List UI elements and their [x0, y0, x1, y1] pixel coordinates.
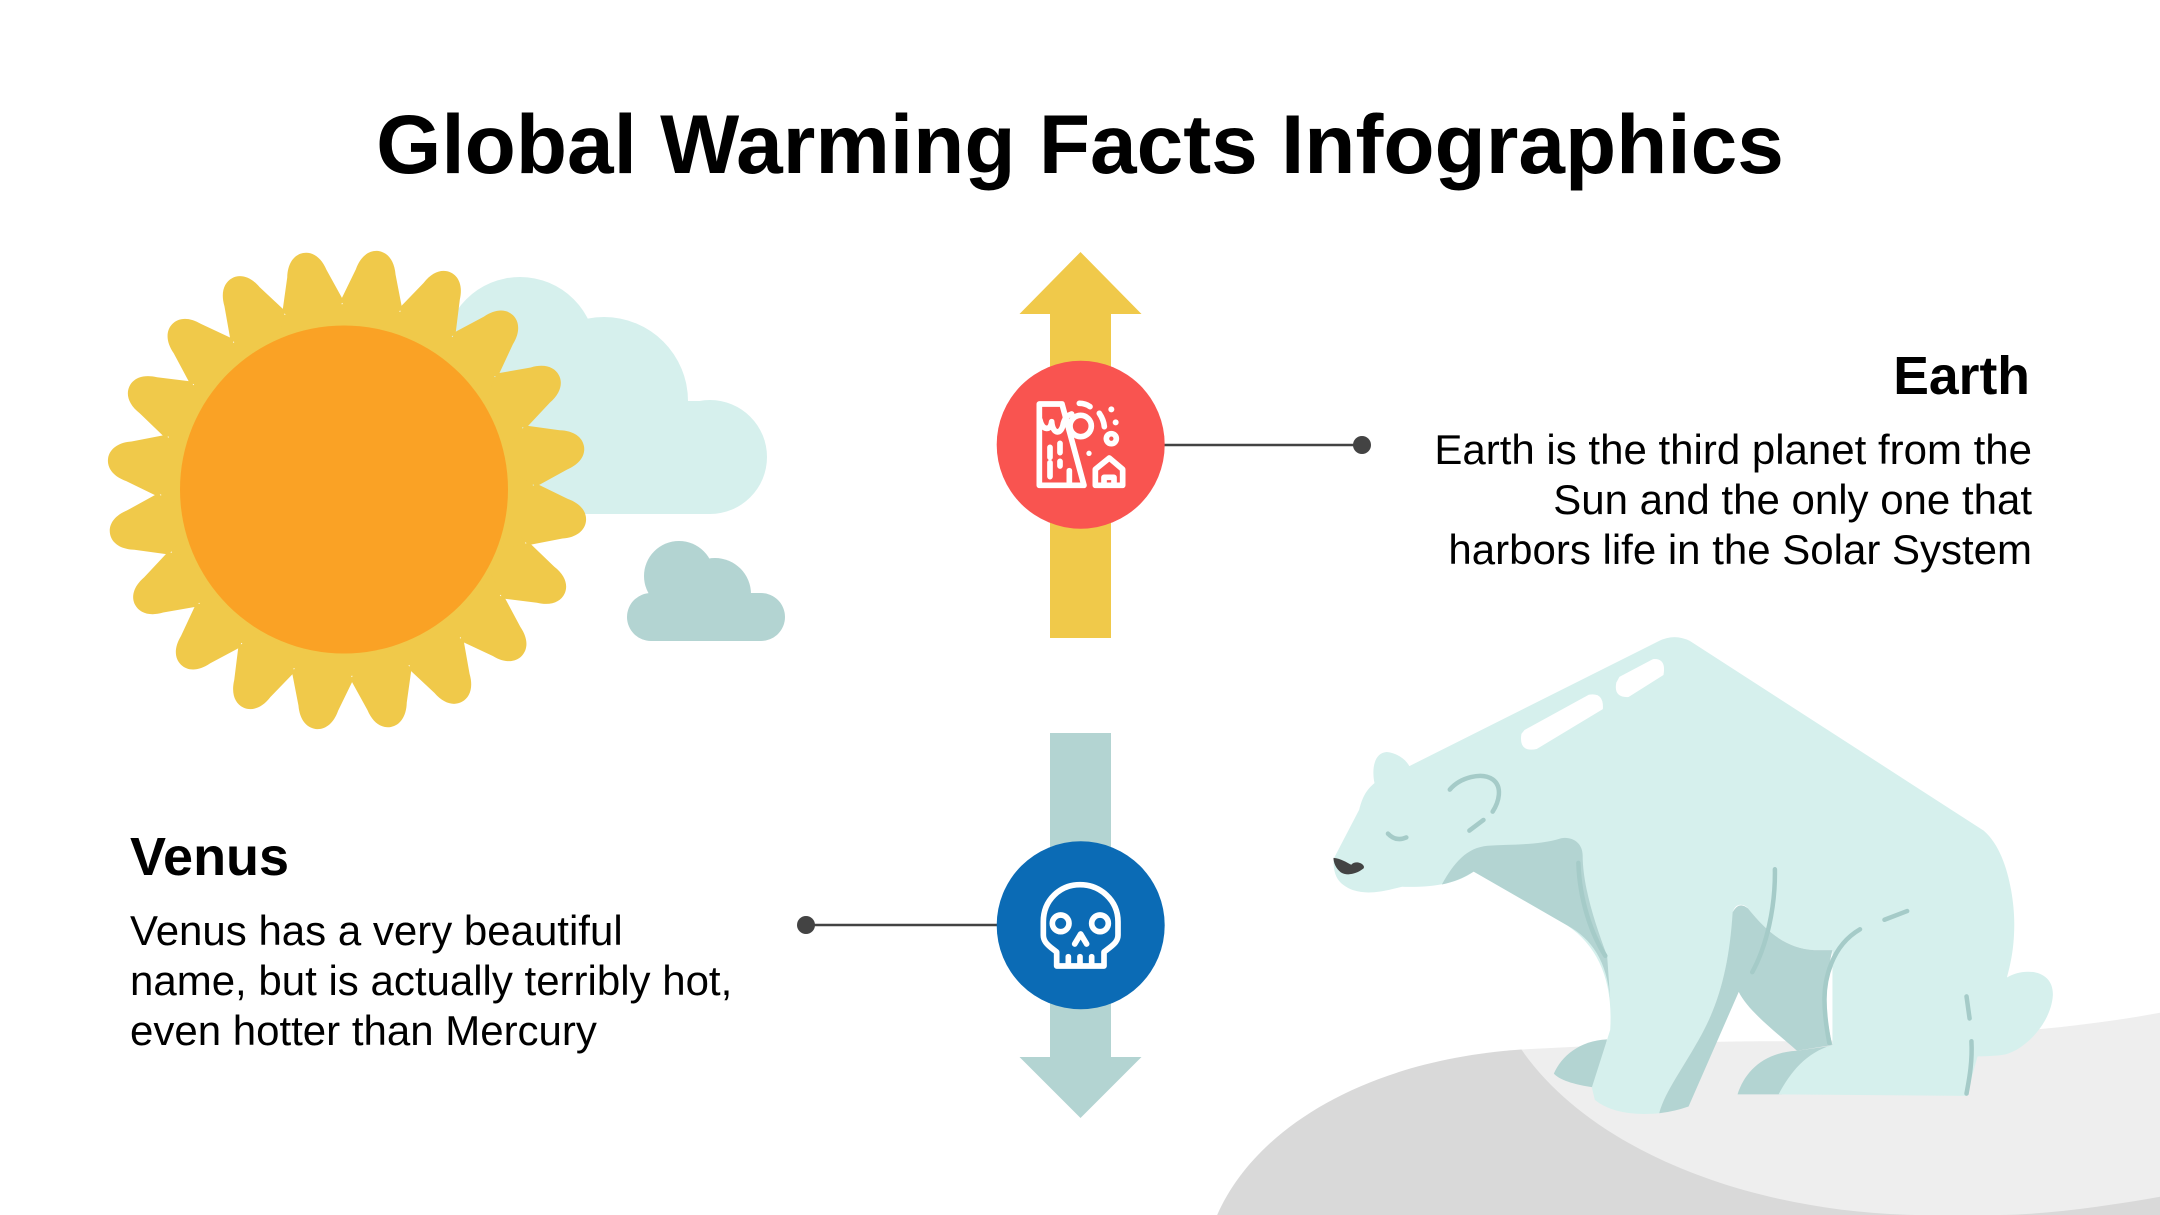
illustration: polar bear: [1333, 637, 2053, 1114]
text block: Venus: Venus has a very beautiful: [130, 907, 623, 954]
text block: Earth: Earth: [1893, 347, 2030, 406]
text block: Earth: Sun and the only one that: [1553, 476, 2032, 523]
illustration: small cloud: [627, 541, 785, 641]
title: Global Warming Facts Infographics: [376, 97, 1784, 191]
text block: Venus: [130, 827, 732, 1054]
arrow: up (yellow): [1020, 252, 1142, 638]
connector: Earth: [1160, 436, 1371, 454]
text block: Venus: even hotter than Mercury: [130, 1007, 597, 1054]
text block: Earth: [1434, 347, 2032, 573]
illustration: sun: [104, 247, 590, 733]
icon: blue circle with skull: [997, 841, 1165, 1009]
text block: Earth: harbors life in the Solar System: [1448, 526, 2032, 573]
text block: Earth: Earth is the third planet from the: [1434, 426, 2032, 473]
illustration: ice ground: [1217, 1013, 2160, 1215]
icon: red circle with melting building and house: [997, 361, 1165, 529]
text block: Venus: name, but is actually terribly hot,: [130, 957, 732, 1004]
arrow: down (teal): [1020, 733, 1142, 1118]
connector: Venus: [797, 916, 1000, 934]
text block: Venus: Venus: [130, 827, 289, 887]
illustration: large cloud: [444, 277, 767, 514]
